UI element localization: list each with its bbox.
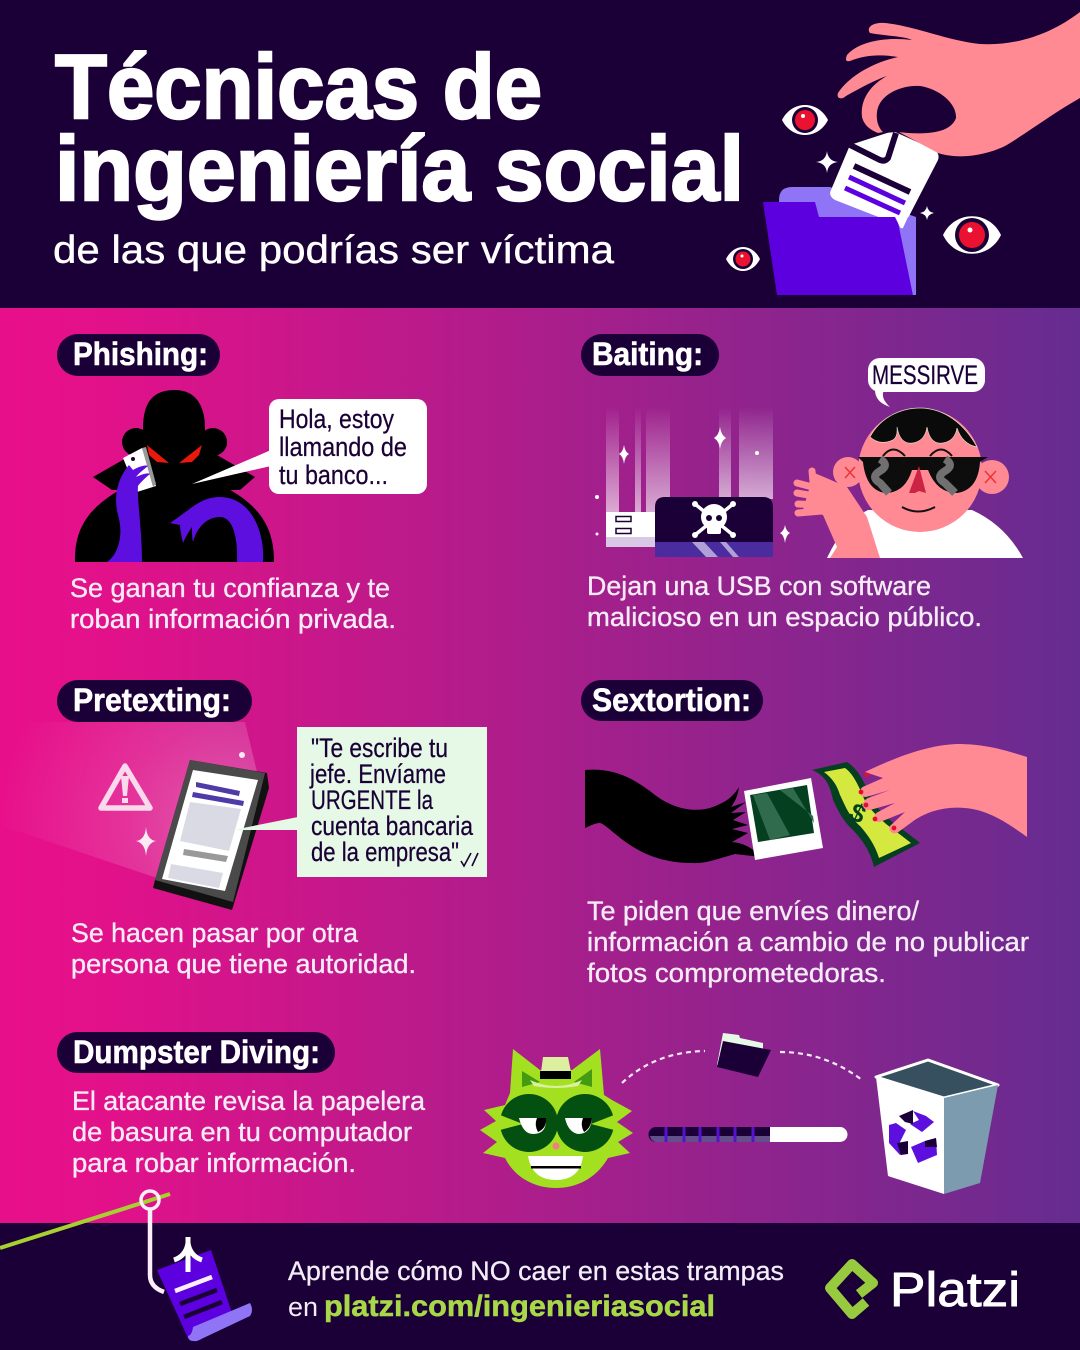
footer band xyxy=(0,1223,1080,1350)
speech bubble: urgent message: cuenta bancaria xyxy=(311,811,474,841)
document xyxy=(830,131,939,226)
icon: banknote: $ xyxy=(845,796,871,830)
description: phishing xyxy=(70,573,396,634)
description: sextortion: información a cambio de no publicar xyxy=(587,927,1029,957)
fishing line xyxy=(0,1194,170,1248)
eye 3 xyxy=(726,247,760,271)
icon: flying folder xyxy=(717,1033,771,1077)
description: pretexting: Se hacen pasar por otra xyxy=(71,918,359,948)
icon: recycle bin xyxy=(876,1060,998,1194)
title: ingeniería social xyxy=(55,119,744,220)
folder back xyxy=(779,187,916,295)
description: sextortion: fotos comprometedoras. xyxy=(587,958,886,988)
icon: transfer progress bar xyxy=(649,1127,848,1142)
description: dumpster diving: El atacante revisa la papelera xyxy=(72,1086,426,1116)
icon: polaroid photo xyxy=(744,778,823,860)
speech bubble: urgent message: jefe. Envíame xyxy=(309,759,446,789)
speech bubble: messirve: MESSIRVE xyxy=(872,360,978,390)
icon: green monster xyxy=(480,1049,633,1188)
icon: usb with skull xyxy=(595,407,790,557)
icon: hooded caller xyxy=(75,390,274,562)
subtitle: de las que podrías ser víctima xyxy=(53,229,614,272)
speech bubble xyxy=(192,399,427,494)
icon: phone xyxy=(153,760,269,910)
sparkles xyxy=(816,151,838,173)
speech bubble: Hola, estoy xyxy=(279,404,394,434)
eye 1 xyxy=(782,105,828,135)
description: pretexting xyxy=(71,918,416,979)
background gradient panel xyxy=(0,300,1080,1230)
icon: warning triangle xyxy=(101,766,150,808)
description: baiting xyxy=(587,571,982,632)
heading: phishing: Phishing: xyxy=(73,336,208,372)
heading: baiting: Baiting: xyxy=(592,336,703,372)
header band xyxy=(0,0,1080,308)
icon: pink hand xyxy=(859,744,1027,837)
heading: pretexting: Pretexting: xyxy=(73,682,231,718)
panel: sextortion xyxy=(581,680,1029,988)
icon: black claw xyxy=(585,770,761,863)
call to action text: Aprende cómo NO caer en estas trampas xyxy=(288,1256,784,1286)
description: pretexting: persona que tiene autoridad. xyxy=(71,949,416,979)
speech bubble: urgent message: de la empresa" xyxy=(311,837,459,867)
description: dumpster diving: para robar información. xyxy=(72,1148,356,1178)
speech bubble: llamando de xyxy=(279,432,407,462)
folder front xyxy=(763,202,913,295)
panel: baiting xyxy=(581,334,1023,632)
description: phishing: Se ganan tu confianza y te xyxy=(70,573,390,603)
call to action text: en xyxy=(288,1292,318,1322)
eye 2 xyxy=(943,216,1001,254)
icon: fishing hook with document xyxy=(0,1191,252,1341)
speech bubble: messirve xyxy=(868,358,985,407)
description: dumpster diving: de basura en tu computador xyxy=(72,1117,412,1147)
panel: phishing xyxy=(57,334,427,634)
title xyxy=(55,37,744,220)
speech bubble: tu banco... xyxy=(279,460,388,490)
hook xyxy=(150,1210,164,1292)
heading: sextortion: Sextortion: xyxy=(592,682,751,718)
speech bubble: urgent message: "Te escribe tu xyxy=(311,733,448,763)
icon: man with sunglasses xyxy=(797,408,1023,558)
description: phishing: roban información privada. xyxy=(70,604,396,634)
description: baiting: malicioso en un espacio público. xyxy=(587,602,982,632)
icon: banknote xyxy=(812,762,920,867)
call to action text xyxy=(288,1256,784,1323)
panel: dumpster diving xyxy=(57,1032,998,1194)
arrow: dashed transfer arcs xyxy=(622,1051,862,1083)
description: sextortion: Te piden que envíes dinero/ xyxy=(587,896,919,926)
description: baiting: Dejan una USB con software xyxy=(587,571,931,601)
panel: pretexting xyxy=(0,680,487,979)
header illustration: hand stealing file from folder xyxy=(726,12,1080,295)
description: dumpster diving xyxy=(72,1086,426,1178)
description: sextortion xyxy=(587,896,1029,988)
title: Técnicas de xyxy=(55,37,542,138)
heading: dumpster diving: Dumpster Diving: xyxy=(73,1034,320,1070)
hand xyxy=(838,12,1080,156)
document scroll xyxy=(157,1237,252,1341)
speech bubble: urgent message xyxy=(233,727,487,877)
speech bubble: urgent message: URGENTE la xyxy=(311,785,434,815)
logo: platzi xyxy=(830,1264,1020,1317)
light beam xyxy=(0,722,257,878)
logo: platzi: Platzi xyxy=(890,1264,1020,1317)
icon: sparkle xyxy=(136,827,156,856)
call to action text: platzi.com/ingenieriasocial xyxy=(324,1290,715,1323)
